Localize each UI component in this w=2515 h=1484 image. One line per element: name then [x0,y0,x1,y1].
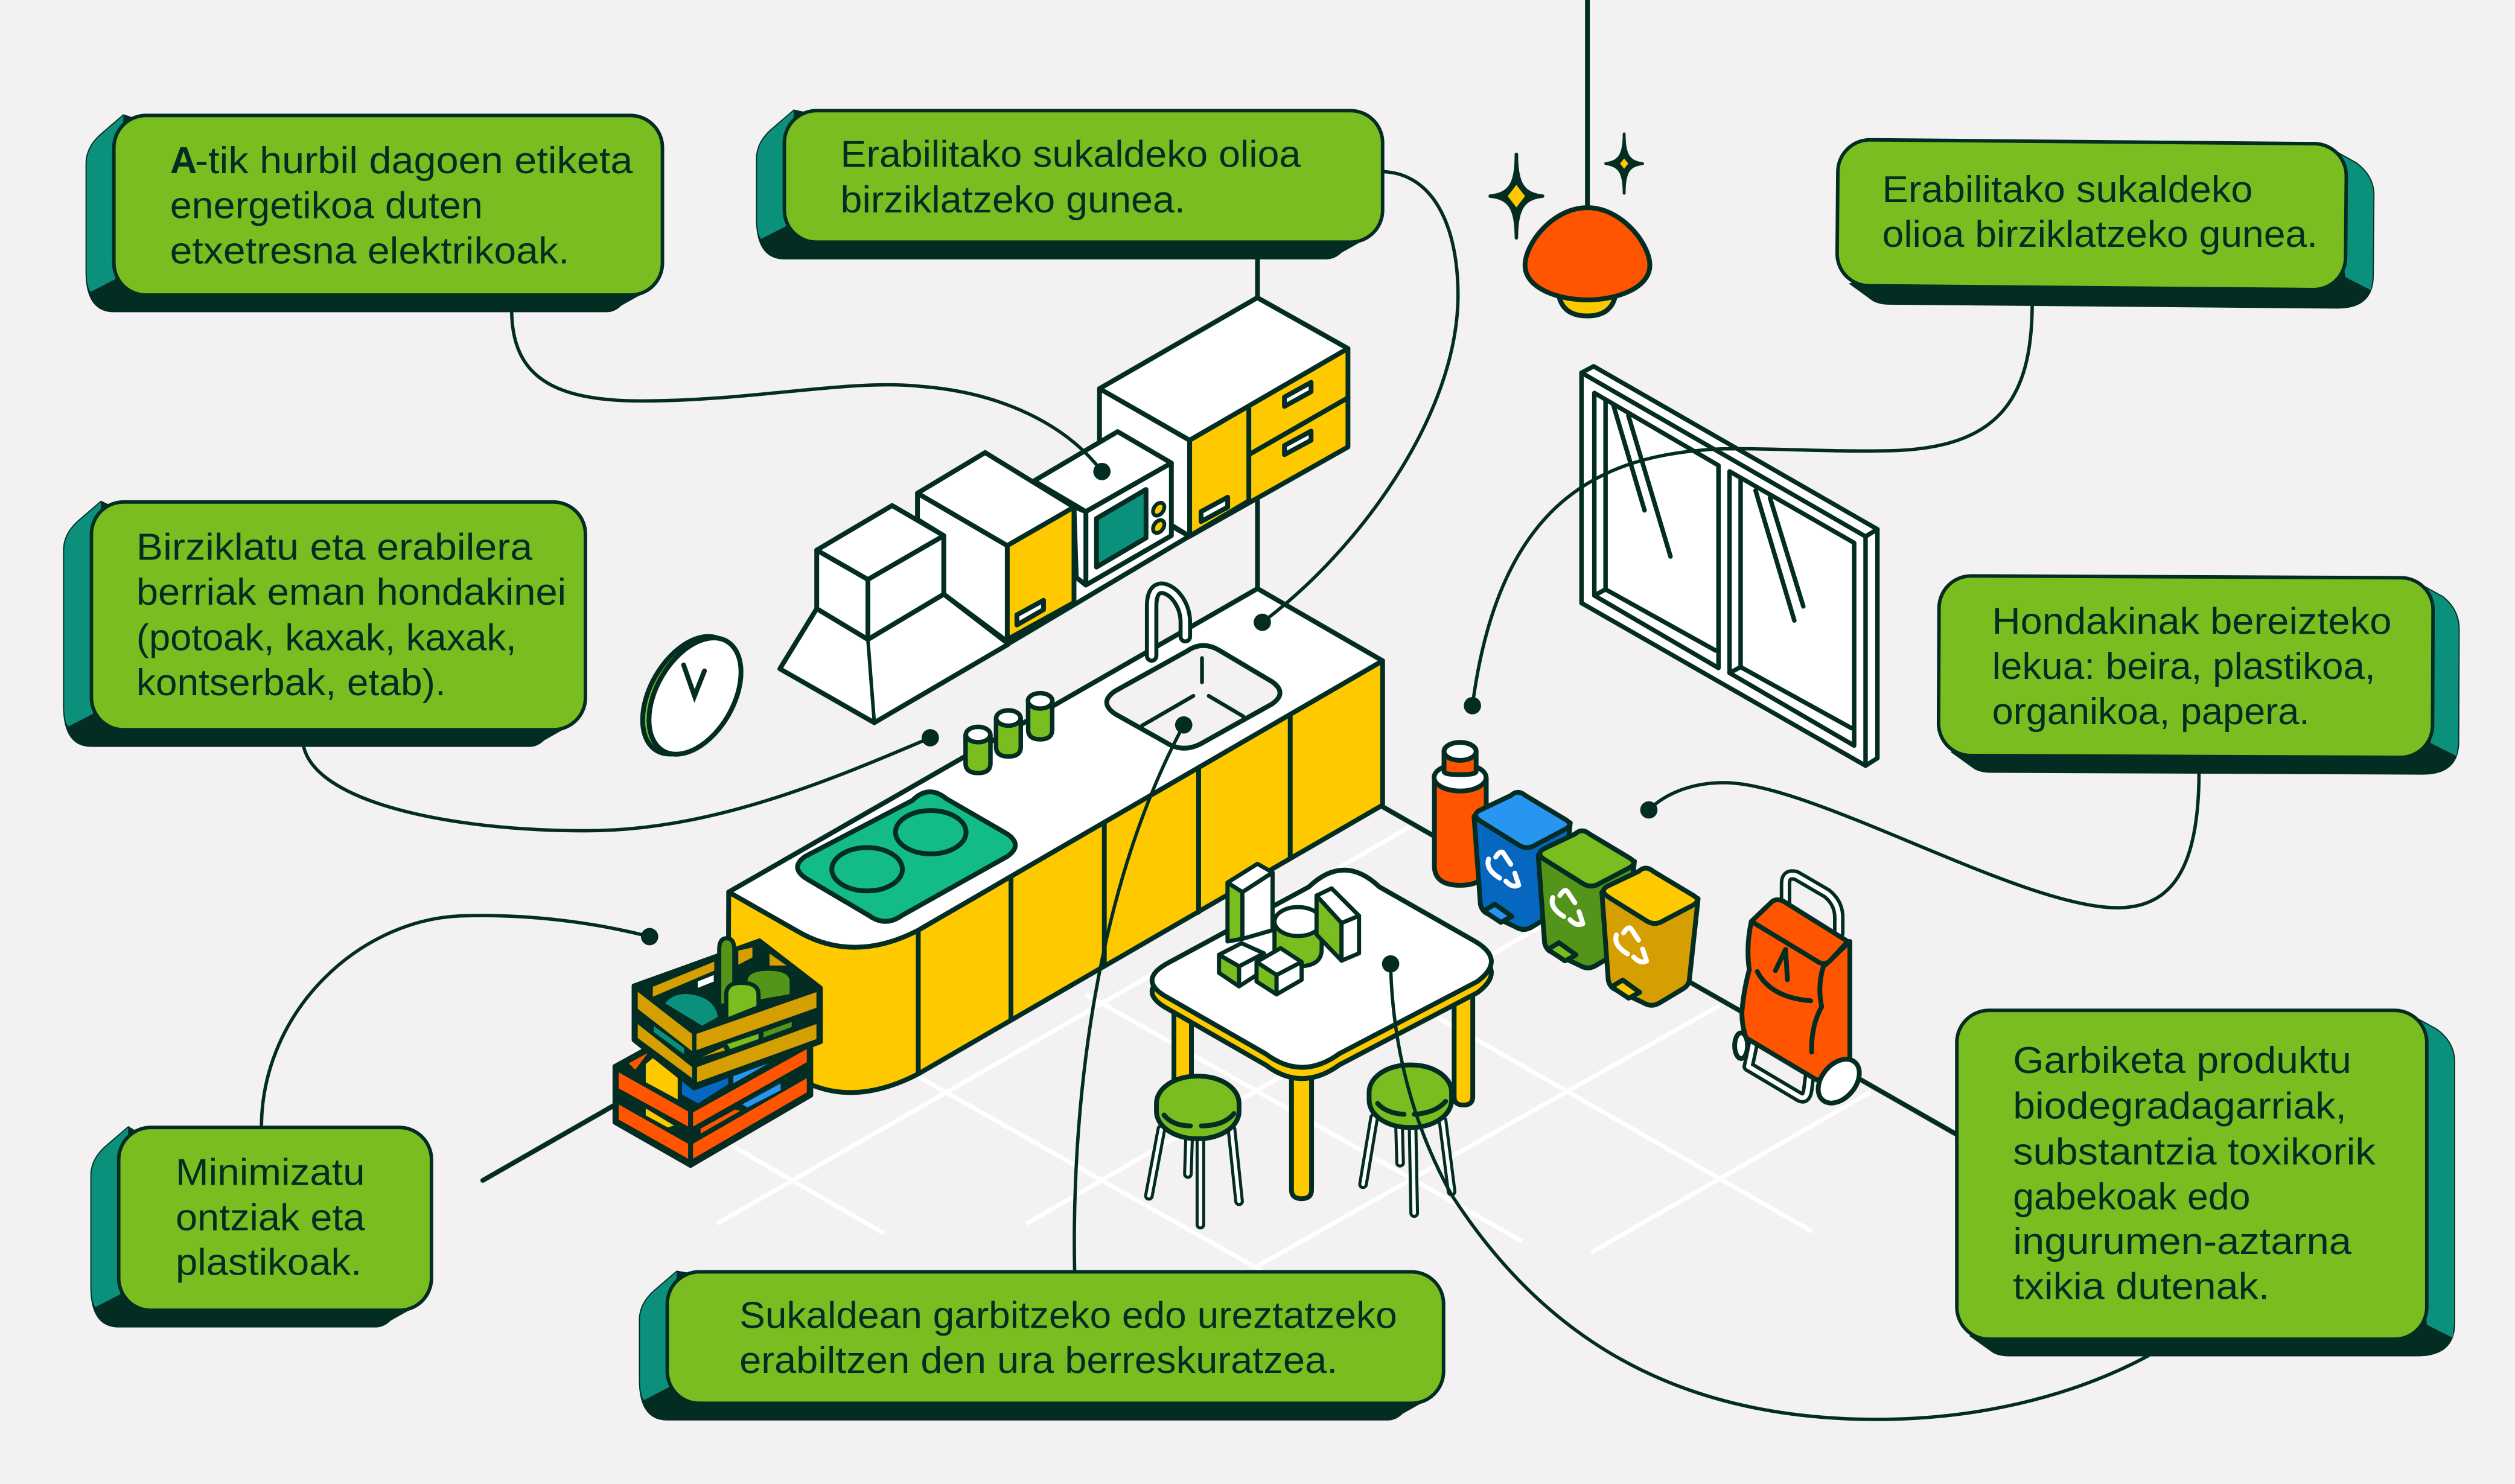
callout: waste separation: lekua: beira, plastikoa, [1992,646,2376,687]
stool right [1363,1065,1452,1213]
upper kitchen units [780,298,1348,722]
connector: waste sorting to bins [1640,771,2199,908]
extractor hood [780,506,1009,722]
shelf line [1010,501,1249,643]
table top [1152,870,1491,1078]
callout: used oil recycling point, right: Erabilitako sukaldeko [1882,169,2252,211]
boxes and cans on the table [1219,864,1359,995]
floor tiles [717,826,1870,1283]
icon: wall clock [623,620,760,770]
callout: reuse waste: (potoak, kaxak, kaxak, [136,617,517,659]
callout: minimise packaging: ontziak eta [176,1197,365,1238]
top crate: ochre with bottles [634,938,821,1088]
connector: water reuse to sink [1074,716,1193,1272]
wall base lines [483,241,1959,1180]
callout: energy efficient appliances: etxetresna elektrikoak. [170,231,569,272]
orange bottle [1434,742,1486,885]
callout: used oil recycling point, centre [757,110,1383,258]
bottom crate: orange [614,1042,811,1166]
callout: energy efficient appliances: energetikoa duten [170,185,483,226]
connector: cleaning products to table [1382,955,2149,1419]
wall panel behind microwave [1076,433,1190,603]
recycling bin: blue [1474,792,1570,929]
recycling bin: green [1538,831,1634,968]
callout: minimise packaging: Minimizatu [176,1151,365,1193]
callout: energy efficient appliances: -tik hurbil dagoen etiketa [195,140,633,182]
stool left [1149,1076,1239,1224]
callout: used oil recycling point, right: olioa birziklatzeko gunea. [1882,214,2318,255]
callout: minimise packaging: plastikoak. [176,1242,362,1284]
faucet [1152,588,1185,656]
sink [1107,646,1280,748]
connector: oil point to bottle [1464,303,2032,715]
microwave [1034,432,1190,585]
island front with yellow cabinets [728,661,1383,1092]
callout: biodegradable cleaning products: txikia dutenak. [2013,1266,2269,1308]
connector: packaging to crates [261,916,658,1127]
callout: reuse waste: berriak eman hondakinei [136,572,566,613]
spice jars [966,693,1053,773]
icon: hanging lamp [1525,0,1650,316]
callout: waste separation: organikoa, papera. [1992,691,2310,733]
middle cabinet [917,453,1074,642]
upper cabinet [1100,298,1348,537]
table legs [1174,978,1473,1199]
callout: biodegradable cleaning products: gabekoak edo [2013,1176,2251,1218]
callout: biodegradable cleaning products: biodegradagarriak, [2013,1086,2347,1127]
connector: energy label to microwave [512,310,1111,480]
callout: water reuse: Sukaldean garbitzeko edo ureztatzeko [739,1295,1397,1336]
callout: energy efficient appliances [87,115,663,311]
callout: reuse waste [64,502,585,746]
kitchen island [728,588,1383,1092]
table with stools [1149,864,1491,1224]
callout: used oil recycling point, centre: Erabilitako sukaldeko olioa [841,133,1301,175]
callout: energy efficient appliances: A [170,140,197,182]
callout: waste separation: Hondakinak bereizteko [1992,601,2391,643]
induction cooktop [797,792,1015,922]
connector: oil recycling to island [1254,171,1458,631]
connector: reuse to jars [303,729,939,831]
callout: used oil recycling point, centre: birziklatzeko gunea. [841,179,1185,221]
callout: reuse waste: kontserbak, etab). [136,662,446,704]
stacked crates [614,938,821,1166]
island worktop [728,588,1383,947]
callout: used oil recycling point, right [1837,139,2374,308]
callout: reuse waste: Birziklatu eta erabilera [136,526,533,568]
shopping trolley [1735,875,1867,1111]
callout: minimise packaging [91,1127,432,1326]
icon: small sparkle [1605,134,1643,193]
recycling bin: yellow [1602,868,1698,1005]
window [1581,366,1878,766]
callout: biodegradable cleaning products: ingurumen-aztarna [2013,1221,2352,1263]
callout: biodegradable cleaning products: substantzia toxikorik [2013,1131,2376,1173]
callout: water reuse: erabiltzen den ura berreskuratzea. [739,1340,1337,1381]
callout: biodegradable cleaning products: Garbiketa produktu [2013,1040,2351,1081]
callout: waste separation [1939,576,2459,774]
callout: water reuse [640,1272,1444,1419]
icon: large sparkle [1490,154,1543,238]
callout: biodegradable cleaning products [1957,1010,2454,1355]
